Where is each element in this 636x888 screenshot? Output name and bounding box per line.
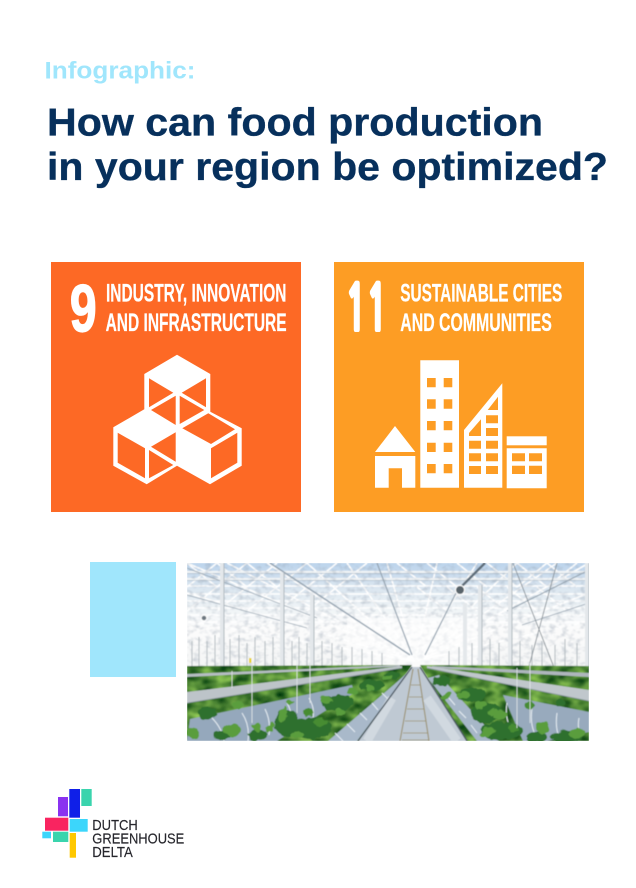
far columns (192, 635, 577, 667)
logo wordmark: DELTA (92, 845, 133, 861)
floor walkway (358, 667, 467, 741)
rafters (187, 563, 589, 670)
icon: stacked cubes (113, 355, 242, 484)
panel: SDG 9 (51, 262, 301, 512)
photo: greenhouse interior (187, 563, 589, 741)
main columns (222, 563, 589, 683)
logo wordmark: DUTCH (92, 818, 138, 834)
logo wordmark: GREENHOUSE (92, 832, 185, 848)
SDG 11 number: 11 (346, 279, 388, 340)
plant beds (187, 664, 589, 741)
irrigation gutters (187, 685, 354, 741)
SDG 11 heading (400, 280, 562, 337)
eyebrow label: Infographic: (44, 57, 196, 84)
SDG 9 heading: INDUSTRY, INNOVATION (106, 280, 286, 308)
leaves (186, 671, 585, 743)
title (47, 102, 608, 189)
logo mark (42, 789, 92, 858)
SDG 9 heading: AND INFRASTRUCTURE (106, 309, 287, 337)
SDG 11 heading: AND COMMUNITIES (400, 309, 552, 337)
title: in your region be optimized? (47, 146, 608, 189)
logo wordmark (92, 818, 185, 861)
fans (455, 585, 465, 595)
hanging strings (232, 658, 530, 728)
gutter ribs (212, 693, 581, 741)
support pipes (187, 665, 400, 677)
logo: Dutch Greenhouse Delta (42, 789, 185, 861)
yellow tag (249, 658, 251, 663)
haze mottling (187, 563, 589, 667)
title: How can food production (47, 102, 543, 144)
decorative blue block (90, 562, 176, 677)
icon: city buildings (375, 360, 547, 488)
greenhouse roof structure (187, 563, 589, 661)
panel: SDG 11 (334, 262, 584, 512)
SDG 9 number: 9 (70, 271, 97, 346)
SDG 9 heading (106, 280, 287, 337)
